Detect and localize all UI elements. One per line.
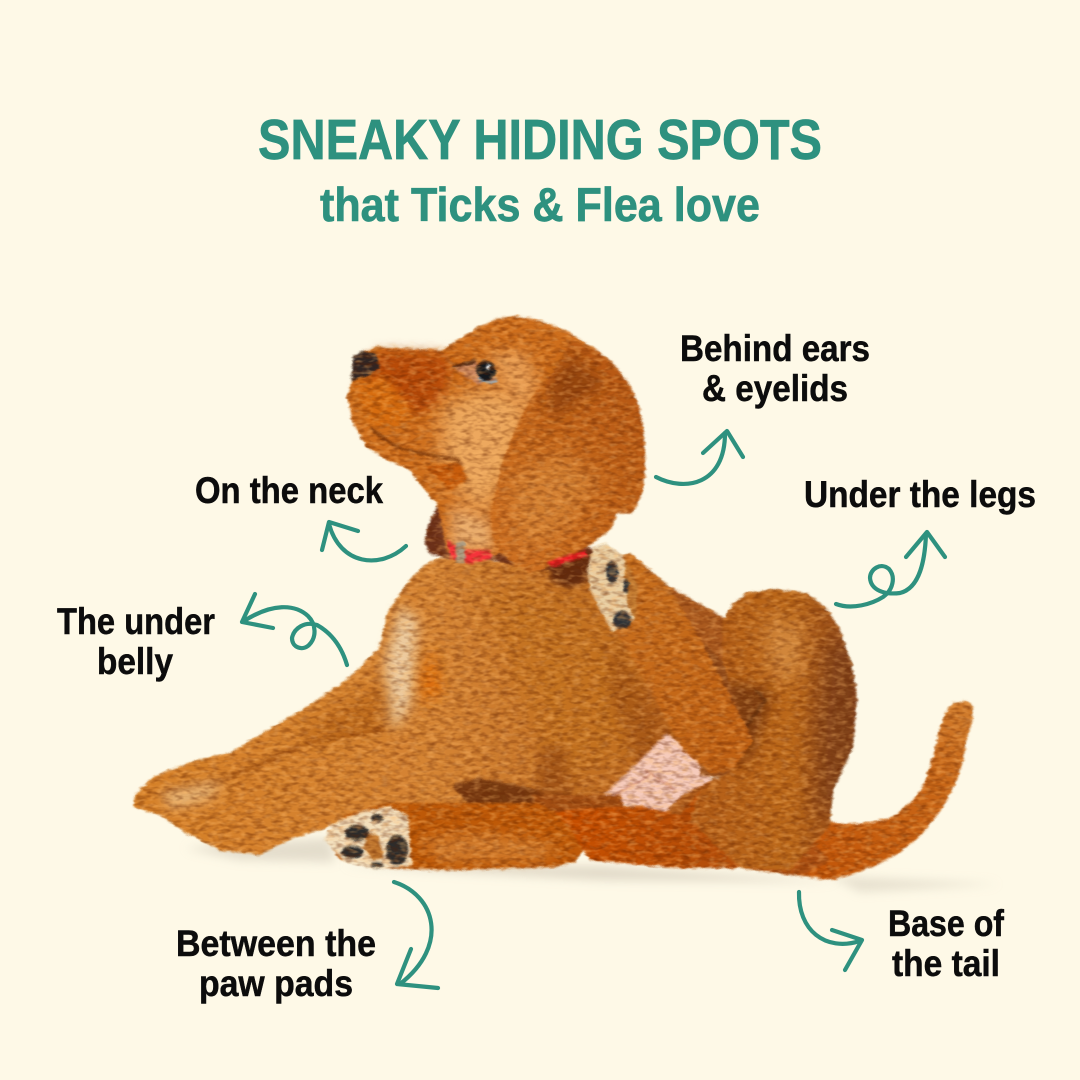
upper leg shade [300,680,395,745]
label: behind ears and eyelids [680,328,870,409]
dark patch under ear [548,552,596,588]
arrow: on the neck [322,522,406,560]
lower front leg [327,803,583,870]
arrow: the under belly [242,594,347,665]
ear [490,340,645,573]
muzzle [365,352,452,415]
arrow: between the paw pads [394,882,438,988]
label: behind ears and eyelids: & eyelids [702,368,848,409]
hind lower leg [553,790,830,876]
haunch shading [725,615,870,820]
label: on the neck: On the neck [195,470,383,511]
pink belly [595,733,712,817]
floor shadows [185,838,1000,892]
raised paw with pads [587,544,638,632]
eye [452,361,498,384]
nose [352,351,380,381]
label: the under belly: belly [97,641,173,682]
underlay: belly to hind leg [530,795,630,825]
ear lower highlight [510,450,600,550]
head [347,316,613,556]
belly fold lines [615,770,675,795]
paw highlight [160,780,225,810]
underlay: leg to haunch [700,640,765,785]
title [258,108,822,231]
dark collar mane [425,507,600,582]
shoulder shading [480,585,640,780]
label: under the legs: Under the legs [804,474,1036,515]
label: the under belly: The under [57,601,215,642]
collar buckle [456,541,465,563]
mouth line [370,428,460,460]
body dark seam [535,745,570,804]
body [133,553,735,855]
orange chest patch [420,645,442,705]
arrow: under the legs [836,532,945,606]
heading: sneaky hiding spots: SNEAKY HIDING SPOTS [258,108,822,172]
ear top shading [550,355,605,420]
forehead patch [488,350,540,412]
illustration: scratching puppy [133,316,973,880]
haunch [690,589,857,870]
label: between the paw pads: Between the [176,923,376,964]
front paw with pads [323,806,412,869]
cheek [440,385,530,520]
dark fold [452,778,550,808]
chest pale patch [385,605,418,725]
lower muzzle [353,375,412,428]
neck fur [450,505,495,552]
underlay: belly to haunch [660,778,745,835]
arrow: behind ears [656,431,743,484]
label: between the paw pads: paw pads [199,963,353,1004]
tail [780,701,973,880]
label: base of the tail [888,903,1005,984]
label: base of the tail: the tail [892,943,1000,984]
raised hind leg [600,553,753,773]
lower leg highlight [420,832,560,862]
leg separation [162,728,385,795]
label: behind ears and eyelids: Behind ears [680,328,870,369]
subheading: that Ticks & Flea love [320,178,760,231]
jaw patch [425,462,468,490]
back sliver behind leg [670,587,723,660]
collar strap left [447,540,492,564]
leg and body seam shadow [610,640,675,765]
arrow: base of the tail [799,892,862,970]
label: base of the tail: Base of [888,903,1005,944]
collar strap right [547,550,588,567]
label: between the paw pads [176,923,376,1004]
label: the under belly [57,601,215,682]
